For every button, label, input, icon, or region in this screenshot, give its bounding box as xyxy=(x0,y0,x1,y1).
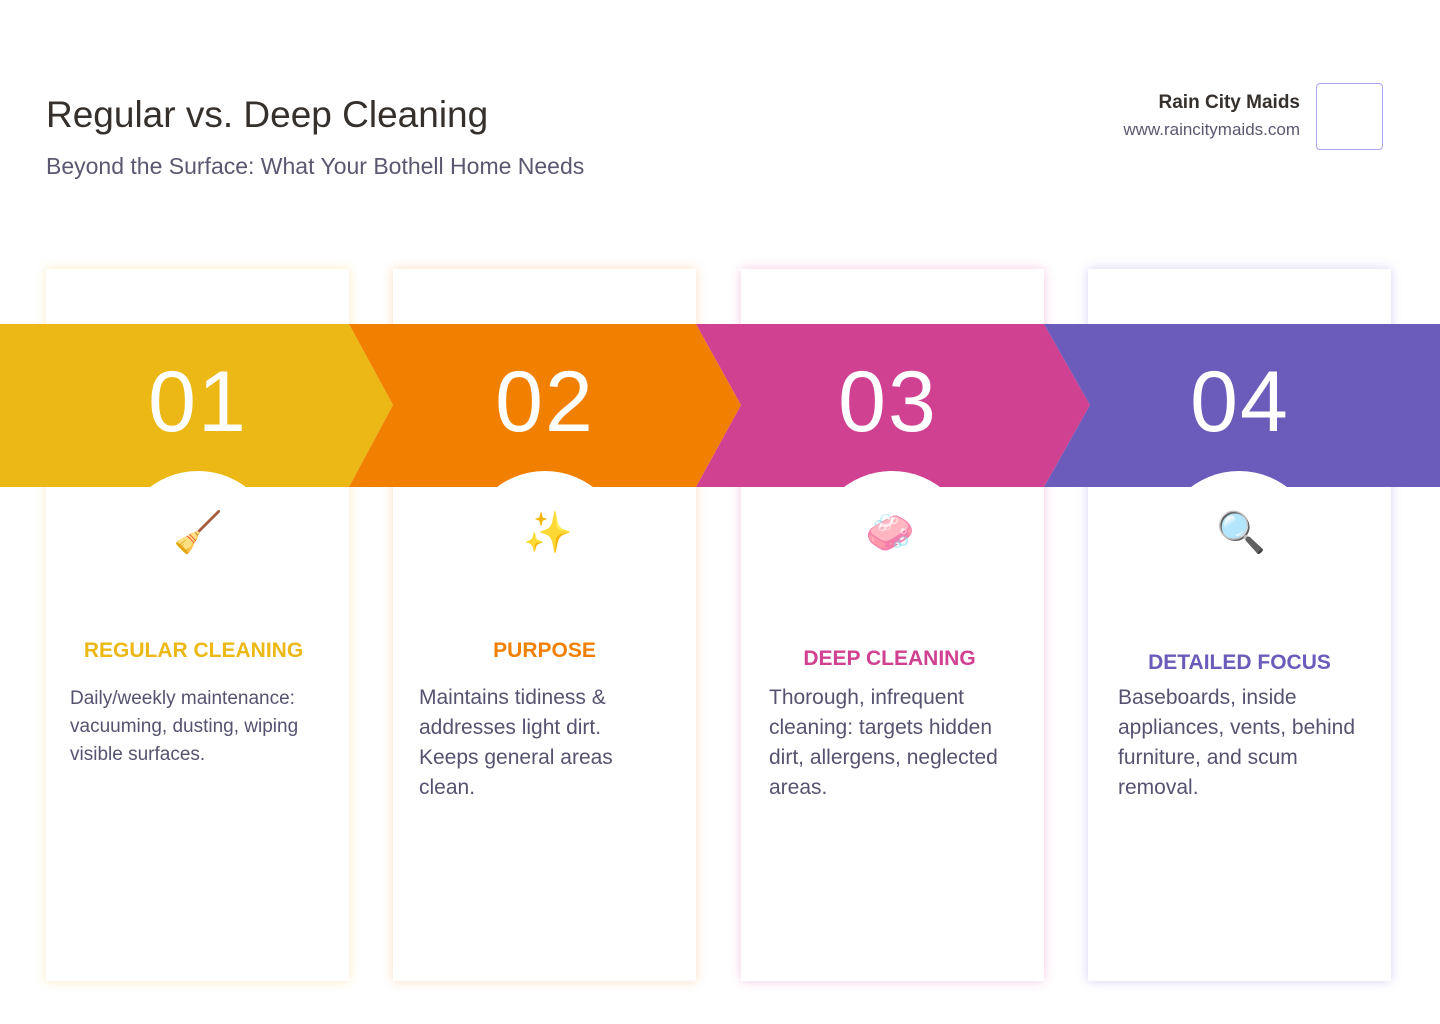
card 1 text: vacuuming, dusting, wiping xyxy=(70,716,298,737)
card 4 text: DETAILED FOCUS xyxy=(1148,651,1331,674)
card 4 text: furniture, and scum xyxy=(1118,746,1298,769)
icon: sparkles: ✨ xyxy=(523,509,573,556)
text: 04 xyxy=(1190,354,1290,450)
card 4 text xyxy=(1118,651,1355,799)
card 3 text: dirt, allergens, neglected xyxy=(769,746,998,769)
icon: broom: 🧹 xyxy=(173,509,223,556)
card 2 xyxy=(393,269,696,981)
card 1 text: visible surfaces. xyxy=(70,744,205,765)
card 4 xyxy=(1088,269,1391,981)
card 2 text: addresses light dirt. xyxy=(419,716,601,739)
card 3 text: areas. xyxy=(769,776,827,799)
card 3 text: cleaning: targets hidden xyxy=(769,716,992,739)
logo box xyxy=(1316,83,1383,150)
numbers: 01 xyxy=(148,354,248,450)
title: Regular vs. Deep Cleaning xyxy=(46,94,488,135)
subtitle: Beyond the Surface: What Your Bothell Home Needs xyxy=(46,153,584,179)
card 2 text: Maintains tidiness & xyxy=(419,686,606,709)
card 3 xyxy=(741,269,1044,981)
brand: www.raincitymaids.com xyxy=(1123,120,1300,139)
card 4 text: removal. xyxy=(1118,776,1199,799)
icon: magnifier: 🔍 xyxy=(1216,509,1266,556)
text: 03 xyxy=(838,354,938,450)
brand xyxy=(1123,92,1300,139)
card 2 text xyxy=(419,639,613,799)
card 2 text: Keeps general areas xyxy=(419,746,613,769)
card 2 text: PURPOSE xyxy=(493,639,596,662)
card 4 text: Baseboards, inside xyxy=(1118,686,1297,709)
card 2 text: clean. xyxy=(419,776,475,799)
card 1 text xyxy=(70,639,303,765)
card 1 text: REGULAR CLEANING xyxy=(84,639,303,662)
icon: soap: 🧼 xyxy=(865,509,915,556)
card 1 text: Daily/weekly maintenance: xyxy=(70,688,295,709)
card 1 xyxy=(46,269,349,981)
card 3 text: DEEP CLEANING xyxy=(803,647,976,670)
brand: Rain City Maids xyxy=(1159,92,1300,113)
card 3 text xyxy=(769,647,998,799)
card 3 text: Thorough, infrequent xyxy=(769,686,964,709)
text: 02 xyxy=(495,354,595,450)
card 4 text: appliances, vents, behind xyxy=(1118,716,1355,739)
